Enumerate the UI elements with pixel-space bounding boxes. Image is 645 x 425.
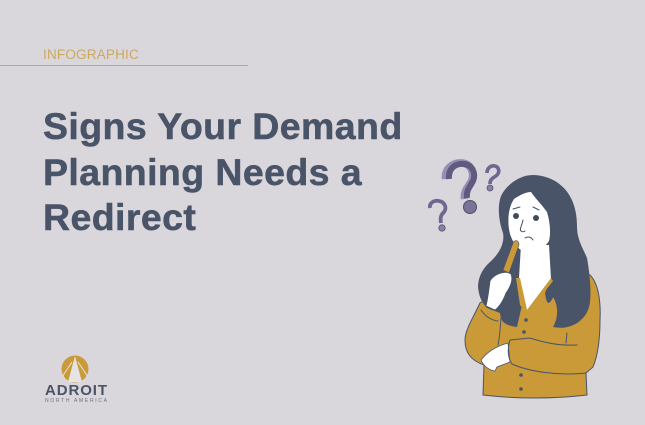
woman: neck and collar <box>519 245 551 310</box>
woman: raised hand <box>486 272 512 310</box>
title <box>43 105 403 238</box>
woman: jacket body <box>465 271 600 398</box>
woman: pen <box>503 241 519 273</box>
icon: small right question mark <box>487 166 499 191</box>
woman: jacket details <box>481 310 586 391</box>
title: Planning Needs a <box>43 150 362 192</box>
title: Redirect <box>43 196 196 238</box>
rule under eyebrow <box>0 65 248 66</box>
woman: lower hand <box>481 343 510 371</box>
woman: collar lapels <box>516 278 553 315</box>
logo tagline: NORTH AMERICA <box>45 398 108 404</box>
woman: facial features <box>513 207 539 240</box>
icon: small left question mark <box>430 201 445 231</box>
woman: hair <box>478 175 590 328</box>
icon: large question mark <box>445 163 476 214</box>
title: Signs Your Demand <box>43 105 403 147</box>
eyebrow label: INFOGRAPHIC <box>43 47 139 62</box>
logo mark <box>62 356 88 382</box>
woman: face <box>508 192 550 252</box>
logo wordmark: ADROIT <box>45 382 107 399</box>
